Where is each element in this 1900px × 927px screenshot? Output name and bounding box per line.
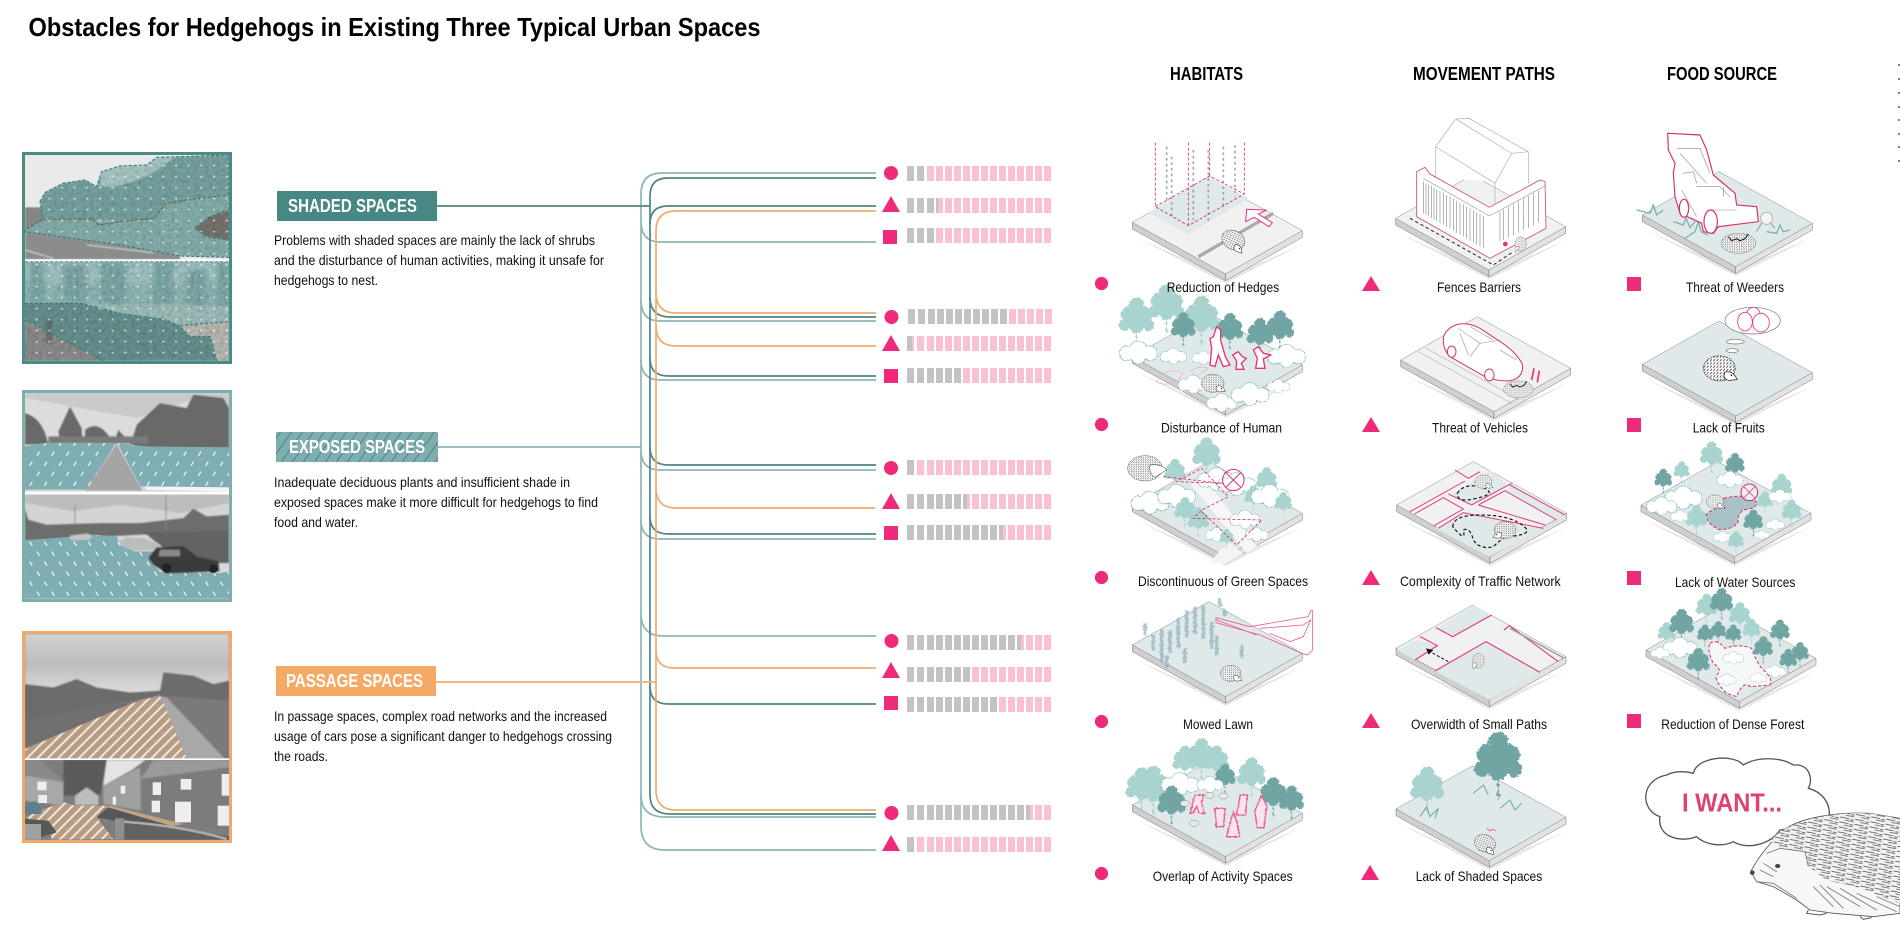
label: shaded spaces [277,191,437,221]
label: exposed spaces [276,432,438,462]
bullet: square [1627,571,1641,585]
text: exposed spaces description [274,474,598,530]
bar row 2 [907,198,1051,213]
bar row 1 [907,166,1051,181]
bullet: triangle [1362,276,1380,291]
bullet: circle row 4 [884,310,898,324]
text: exposed spaces description: food and water. [274,514,358,530]
illustration: crowd among trees [1126,738,1304,866]
panel: shaded spaces photo [23,153,231,362]
panel: passage spaces photo [23,632,231,842]
caption: Lack of Shaded Spaces [1416,868,1542,884]
bullet: triangle [1361,865,1379,880]
orange connectors [436,211,876,810]
heading: food source: FOOD SOURCE [1667,64,1777,84]
bullet: triangle row 11 [882,662,900,678]
bar row 9 [907,525,1051,540]
caption: Mowed Lawn [1183,716,1253,732]
illustration: wide road plate [1396,605,1566,709]
text: shaded spaces description [274,232,604,288]
bar row 5 [907,336,1051,351]
bullet: triangle row 2 [882,196,900,212]
text: shaded spaces description: Problems with shaded spaces are mainly the lack of shrubs [274,232,595,248]
label: passage spaces: PASSAGE SPACES [286,671,423,691]
caption: Threat of Vehicles [1432,420,1528,436]
edge tick marks [1898,65,1900,161]
illustration: car and hedgehog [1401,317,1571,421]
bullet: square row 3 [883,230,897,244]
score rows: group one [882,166,1051,244]
illustration: fragmented greenery [1128,437,1302,566]
score rows: group two [882,309,1052,383]
illustration: mowed lawn with shears [1132,600,1313,706]
illustration: hedges plate [1132,143,1302,283]
caption: Lack of Water Sources [1675,574,1795,590]
caption: Reduction of Hedges [1167,279,1279,295]
panel: lack of shaded spaces [1361,732,1566,884]
score rows: group four [882,634,1051,712]
panel: mowed lawn [1095,600,1313,732]
panel: complexity of traffic network [1362,462,1567,589]
speech cloud [1646,758,1829,846]
bullet: square row 12 [884,696,898,710]
illustration: thinned forest [1646,588,1816,711]
heading: habitats: HABITATS [1170,64,1243,84]
bar row 4 [908,309,1052,324]
illustration: house and fence [1396,118,1566,279]
text: shaded spaces description: hedgehogs to nest. [274,272,378,288]
illustration: dried pond [1641,441,1811,566]
bullet: square [1627,418,1641,432]
bar row 6 [907,368,1051,383]
bar row 8 [907,494,1051,509]
bar row 7 [907,460,1051,475]
light teal connectors [438,173,876,850]
illustration: road network [1397,462,1567,566]
bullet: triangle [1362,570,1380,585]
illustration: people in woodland [1119,284,1306,418]
bar row 10 [907,635,1051,650]
title: Obstacles for Hedgehogs in Existing Three Typical Urban Spaces [28,12,760,42]
panel: disturbance of human [1095,284,1306,436]
bullet: triangle row 14 [882,835,900,851]
heading: movement paths: MOVEMENT PATHS [1413,64,1555,84]
text: passage spaces description: the roads. [274,748,328,764]
panel: reduction of hedges [1095,143,1302,295]
panel: overwidth of small paths [1362,605,1566,732]
bullet: triangle [1362,417,1380,432]
score rows: group three [882,460,1051,540]
text: passage spaces description: usage of cars pose a significant danger to hedgehogs crossing [274,728,612,744]
bullet: triangle row 8 [882,493,900,509]
panel: reduction of dense forest [1627,588,1816,732]
bullet: circle [1095,715,1108,728]
label: passage spaces [276,666,436,696]
label: shaded spaces: SHADED SPACES [288,196,417,216]
caption: Lack of Fruits [1693,420,1765,436]
text: passage spaces description: In passage spaces, complex road networks and the increased [274,708,607,724]
bullet: triangle [1362,713,1380,728]
illustration: sparse trees [1396,732,1566,870]
caption: Threat of Weeders [1686,279,1784,295]
bullet: circle [1095,571,1108,584]
caption: Overlap of Activity Spaces [1153,868,1293,884]
caption: Overwidth of Small Paths [1411,716,1547,732]
callout text: I WANT... [1682,788,1782,818]
panel: fences barriers [1362,118,1566,295]
bar row 13 [907,805,1051,820]
bullet: circle [1095,418,1108,431]
bullet: square row 9 [884,526,898,540]
caption: Fences Barriers [1437,279,1521,295]
bar row 11 [907,667,1051,682]
dark teal connectors [437,178,876,814]
bullet: circle row 7 [884,461,898,475]
text: passage spaces description [274,708,612,764]
panel: threat of vehicles [1362,317,1571,436]
bullet: circle row 13 [884,806,898,820]
caption: Complexity of Traffic Network [1400,573,1562,589]
panel: lack of fruits [1627,307,1812,436]
score rows: group five [882,805,1051,852]
bullet: circle [1095,277,1108,290]
bullet: circle [1095,867,1108,880]
bullet: circle row 10 [884,634,898,648]
panel: exposed spaces photo [23,391,231,601]
panel: overlap of activity spaces [1095,738,1304,884]
illustration: thinking hedgehog [1642,307,1812,425]
panel: threat of weeders [1627,133,1812,295]
bar row 3 [907,228,1051,243]
bullet: circle row 1 [884,166,898,180]
caption: Reduction of Dense Forest [1661,716,1804,732]
callout: I want speech cloud and hedgehog [1646,758,1900,919]
bullet: square [1627,714,1641,728]
panel: lack of water sources [1627,441,1811,590]
caption: Discontinuous of Green Spaces [1138,573,1308,589]
bar row 12 [907,697,1051,712]
caption: Disturbance of Human [1161,420,1282,436]
bullet: square [1627,277,1641,291]
text: shaded spaces description: and the disturbance of human activities, making it unsafe for [274,252,604,268]
illustration: lawn mower [1637,133,1812,276]
bar row 14 [907,837,1051,852]
bullet: triangle row 5 [882,335,900,351]
text: exposed spaces description: Inadequate deciduous plants and insufficient shade in [274,474,570,490]
connector lines [436,173,876,850]
panel: discontinuous of green spaces [1095,437,1308,589]
label: exposed spaces: EXPOSED SPACES [289,437,425,457]
bullet: square row 6 [884,369,898,383]
icon: large hedgehog [1750,813,1900,919]
text: exposed spaces description: exposed spaces make it more difficult for hedgehogs to find [274,494,598,510]
